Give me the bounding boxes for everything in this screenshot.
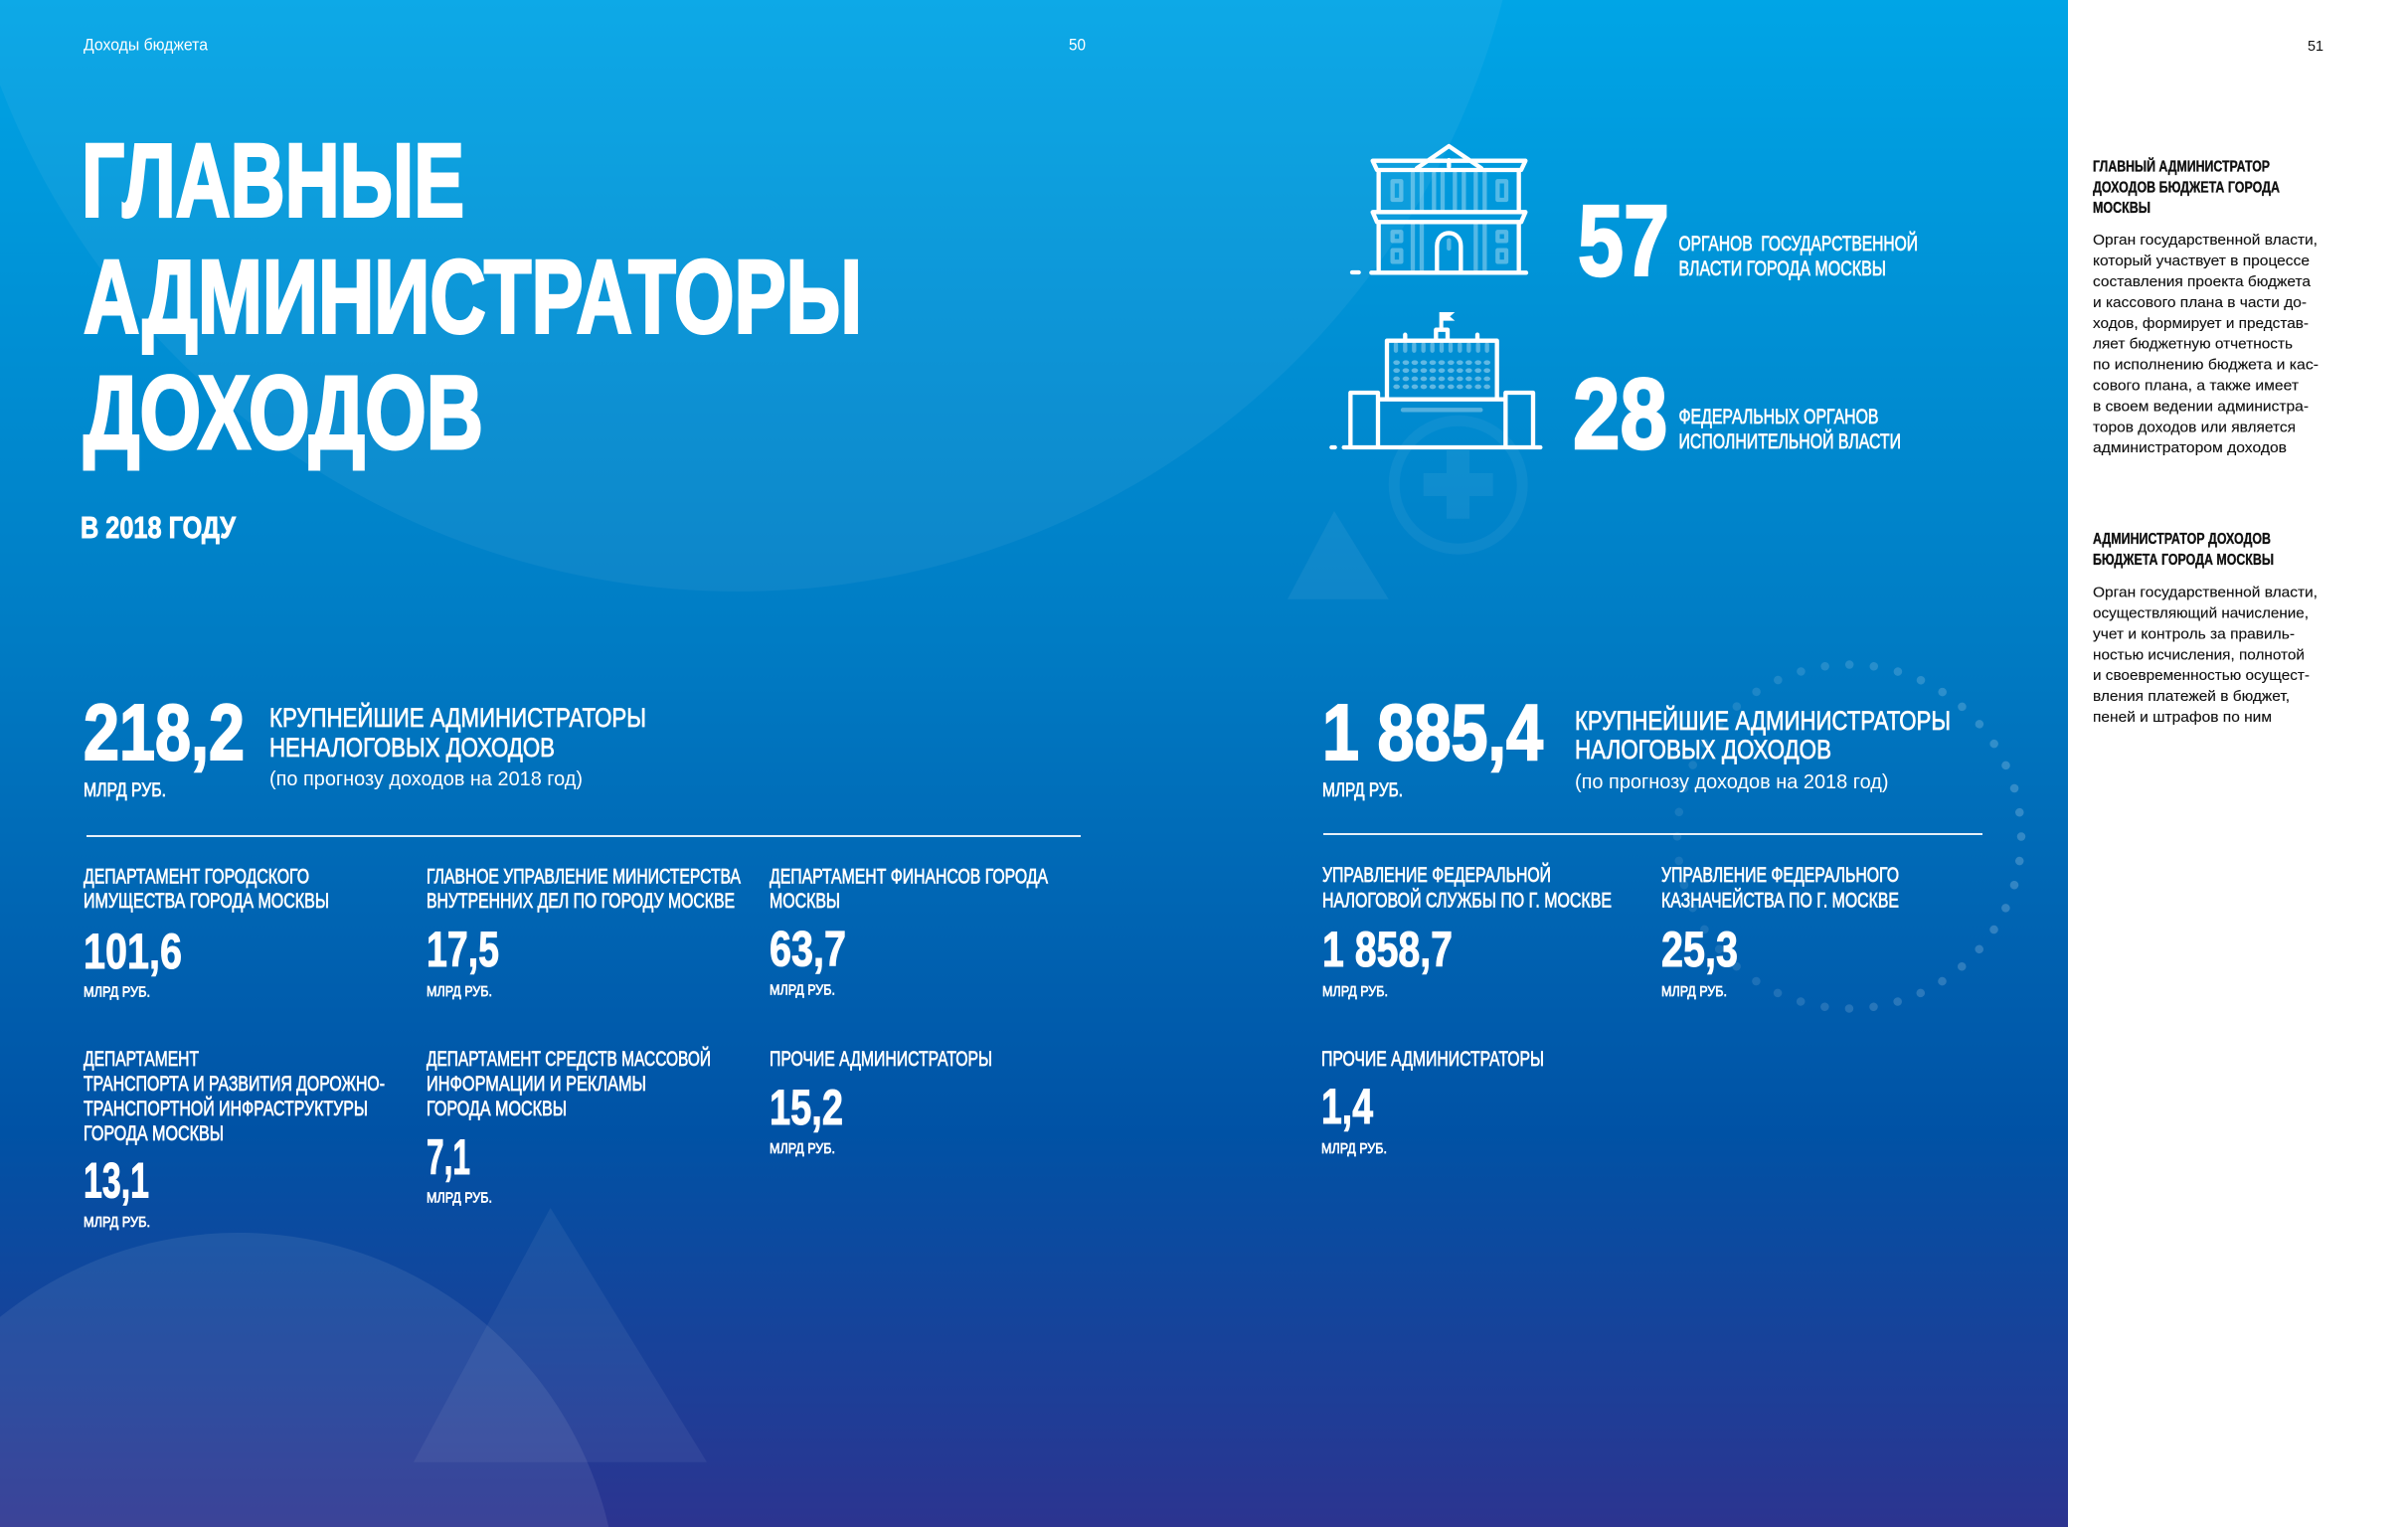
page number 51: 51 bbox=[2308, 38, 2323, 55]
page number 50: 50 bbox=[1069, 36, 1086, 55]
definition: chief administrator: ходов, формирует и представ- bbox=[2093, 315, 2309, 332]
title: ДОХОДОВ bbox=[84, 355, 483, 471]
definition: revenue administrator: Орган государственной власти, bbox=[2093, 585, 2318, 600]
definition: revenue administrator: и своевременностью осущест- bbox=[2093, 667, 2310, 684]
item: media department: ДЕПАРТАМЕНТ СРЕДСТВ МАССОВОЙ bbox=[427, 1047, 711, 1071]
definition: revenue administrator: вления платежей в бюджет, bbox=[2093, 688, 2290, 705]
item: transport department: ТРАНСПОРТА И РАЗВИТИЯ ДОРОЖНО- bbox=[84, 1073, 385, 1096]
item: interior ministry directorate: ВНУТРЕННИХ ДЕЛ ПО ГОРОДУ МОСКВЕ bbox=[427, 890, 735, 913]
item: finance department: МОСКВЫ bbox=[770, 890, 840, 913]
definition: chief administrator: администратором доходов bbox=[2093, 439, 2287, 456]
panel: tax revenue administrators bbox=[1321, 688, 1982, 1157]
definition: revenue administrator: учет и контроль за правиль- bbox=[2093, 625, 2295, 642]
item: city property department: ИМУЩЕСТВА ГОРОДА МОСКВЫ bbox=[84, 890, 329, 913]
definition: chief administrator bbox=[2093, 157, 2319, 456]
item: federal treasury: 25,3 bbox=[1661, 922, 1738, 977]
item: city property department: 101,6 bbox=[84, 924, 182, 979]
item: federal treasury: МЛРД РУБ. bbox=[1661, 983, 1727, 1000]
item: interior ministry directorate: МЛРД РУБ. bbox=[427, 983, 492, 1000]
title: АДМИНИСТРАТОРЫ bbox=[84, 239, 862, 356]
definition: revenue administrator: осуществляющий начисление, bbox=[2093, 604, 2309, 622]
non-tax heading bbox=[269, 702, 646, 790]
item: other administrators non-tax: 15,2 bbox=[770, 1080, 843, 1135]
item: other administrators tax: МЛРД РУБ. bbox=[1321, 1140, 1387, 1157]
item: federal treasury: КАЗНАЧЕЙСТВА ПО Г. МОСКВЕ bbox=[1661, 889, 1899, 913]
item: federal tax service: УПРАВЛЕНИЕ ФЕДЕРАЛЬНОЙ bbox=[1322, 863, 1551, 887]
item: federal tax service bbox=[1322, 863, 1612, 1000]
item: finance department bbox=[770, 865, 1048, 998]
item: city property department: ДЕПАРТАМЕНТ ГОРОДСКОГО bbox=[84, 865, 309, 889]
item: city property department: МЛРД РУБ. bbox=[84, 984, 150, 1000]
item: federal tax service: МЛРД РУБ. bbox=[1322, 983, 1388, 1000]
definition: revenue administrator: БЮДЖЕТА ГОРОДА МОСКВЫ bbox=[2093, 552, 2274, 569]
tax total: МЛРД РУБ. bbox=[1322, 780, 1403, 801]
item: finance department: 63,7 bbox=[770, 921, 846, 976]
item: finance department: МЛРД РУБ. bbox=[770, 982, 835, 998]
item: transport department: МЛРД РУБ. bbox=[84, 1214, 150, 1231]
tax heading: НАЛОГОВЫХ ДОХОДОВ bbox=[1575, 735, 1831, 764]
tax total bbox=[1322, 688, 1543, 801]
definition: chief administrator: в своем ведении администра- bbox=[2093, 398, 2309, 415]
stat: 57 city authorities: ВЛАСТИ ГОРОДА МОСКВЫ bbox=[1678, 256, 1886, 280]
definition: chief administrator: составления проекта бюджета bbox=[2093, 273, 2312, 290]
definition: chief administrator: торов доходов или является bbox=[2093, 419, 2296, 435]
item: media department: ГОРОДА МОСКВЫ bbox=[427, 1098, 567, 1120]
title: ГЛАВНЫЕ bbox=[82, 123, 464, 239]
definition: revenue administrator: ностью исчисления, полнотой bbox=[2093, 646, 2305, 663]
item: media department: 7,1 bbox=[427, 1129, 470, 1185]
item: federal tax service: 1 858,7 bbox=[1322, 922, 1453, 977]
definition: chief administrator: ляет бюджетную отчетность bbox=[2093, 336, 2293, 353]
tax heading: КРУПНЕЙШИЕ АДМИНИСТРАТОРЫ bbox=[1575, 705, 1951, 736]
item: transport department bbox=[84, 1048, 385, 1231]
item: transport department: ГОРОДА МОСКВЫ bbox=[84, 1122, 224, 1145]
definition: chief administrator: ГЛАВНЫЙ АДМИНИСТРАТОР bbox=[2093, 157, 2270, 175]
stat: 28 federal authorities: 28 bbox=[1573, 359, 1667, 470]
definition: chief administrator: который участвует в процессе bbox=[2093, 253, 2310, 269]
stat: 28 federal authorities: ФЕДЕРАЛЬНЫХ ОРГАНОВ bbox=[1678, 405, 1879, 428]
tax total: 1 885,4 bbox=[1322, 688, 1543, 776]
definition: chief administrator: МОСКВЫ bbox=[2093, 200, 2150, 217]
item: transport department: ДЕПАРТАМЕНТ bbox=[84, 1048, 199, 1071]
icon: federal government building bbox=[1331, 312, 1540, 447]
definition: chief administrator: сового плана, а также имеет bbox=[2093, 378, 2299, 394]
item: other administrators non-tax: МЛРД РУБ. bbox=[770, 1140, 835, 1157]
definition: revenue administrator bbox=[2093, 531, 2318, 726]
icon: city government building bbox=[1352, 146, 1526, 272]
non-tax heading: НЕНАЛОГОВЫХ ДОХОДОВ bbox=[269, 733, 555, 763]
panel: white sidebar bbox=[2068, 0, 2408, 1527]
item: federal treasury bbox=[1661, 864, 1899, 1000]
item: interior ministry directorate: ГЛАВНОЕ УПРАВЛЕНИЕ МИНИСТЕРСТВА bbox=[427, 865, 741, 889]
definition: chief administrator: по исполнению бюджета и кас- bbox=[2093, 357, 2319, 374]
panel: non-tax revenue administrators bbox=[84, 688, 1081, 1231]
subtitle: В 2018 ГОДУ bbox=[81, 510, 237, 545]
item: transport department: ТРАНСПОРТНОЙ ИНФРАСТРУКТУРЫ bbox=[84, 1097, 368, 1120]
non-tax heading: КРУПНЕЙШИЕ АДМИНИСТРАТОРЫ bbox=[269, 702, 646, 733]
stat: 57 city authorities bbox=[1578, 186, 1918, 297]
item: other administrators non-tax bbox=[770, 1048, 992, 1157]
definition: revenue administrator: АДМИНИСТРАТОР ДОХОДОВ bbox=[2093, 531, 2271, 548]
item: interior ministry directorate: 17,5 bbox=[427, 922, 499, 977]
item: media department bbox=[427, 1047, 711, 1207]
item: finance department: ДЕПАРТАМЕНТ ФИНАНСОВ ГОРОДА bbox=[770, 865, 1048, 889]
definition: chief administrator: и кассового плана в части до- bbox=[2093, 294, 2307, 311]
item: federal treasury: УПРАВЛЕНИЕ ФЕДЕРАЛЬНОГО bbox=[1661, 864, 1899, 887]
non-tax total: МЛРД РУБ. bbox=[84, 780, 166, 801]
definition: chief administrator: ДОХОДОВ БЮДЖЕТА ГОРОДА bbox=[2093, 179, 2280, 197]
stat: 57 city authorities: ОРГАНОВ ГОСУДАРСТВЕННОЙ bbox=[1678, 231, 1918, 255]
definition: revenue administrator: пеней и штрафов по ним bbox=[2093, 709, 2272, 726]
item: other administrators tax: ПРОЧИЕ АДМИНИСТРАТОРЫ bbox=[1321, 1048, 1544, 1071]
item: other administrators non-tax: ПРОЧИЕ АДМИНИСТРАТОРЫ bbox=[770, 1048, 992, 1071]
item: federal tax service: НАЛОГОВОЙ СЛУЖБЫ ПО Г. МОСКВЕ bbox=[1322, 889, 1612, 913]
item: other administrators tax bbox=[1321, 1048, 1544, 1157]
item: city property department bbox=[84, 865, 329, 1000]
definition: chief administrator: Орган государственной власти, bbox=[2093, 232, 2318, 249]
tax heading bbox=[1575, 705, 1951, 793]
item: media department: ИНФОРМАЦИИ И РЕКЛАМЫ bbox=[427, 1073, 646, 1096]
non-tax heading: (по прогнозу доходов на 2018 год) bbox=[269, 768, 583, 790]
page header: section name: Доходы бюджета bbox=[84, 36, 208, 55]
stat: 28 federal authorities bbox=[1573, 359, 1901, 470]
item: media department: МЛРД РУБ. bbox=[427, 1189, 492, 1207]
stat: 57 city authorities: 57 bbox=[1578, 186, 1669, 297]
item: other administrators tax: 1,4 bbox=[1321, 1079, 1373, 1134]
stat: 28 federal authorities: ИСПОЛНИТЕЛЬНОЙ ВЛАСТИ bbox=[1678, 428, 1901, 453]
non-tax total: 218,2 bbox=[84, 688, 245, 776]
item: interior ministry directorate bbox=[427, 865, 741, 1000]
item: transport department: 13,1 bbox=[84, 1153, 149, 1209]
tax heading: (по прогнозу доходов на 2018 год) bbox=[1575, 771, 1889, 793]
non-tax total bbox=[84, 688, 245, 801]
title bbox=[82, 123, 862, 471]
